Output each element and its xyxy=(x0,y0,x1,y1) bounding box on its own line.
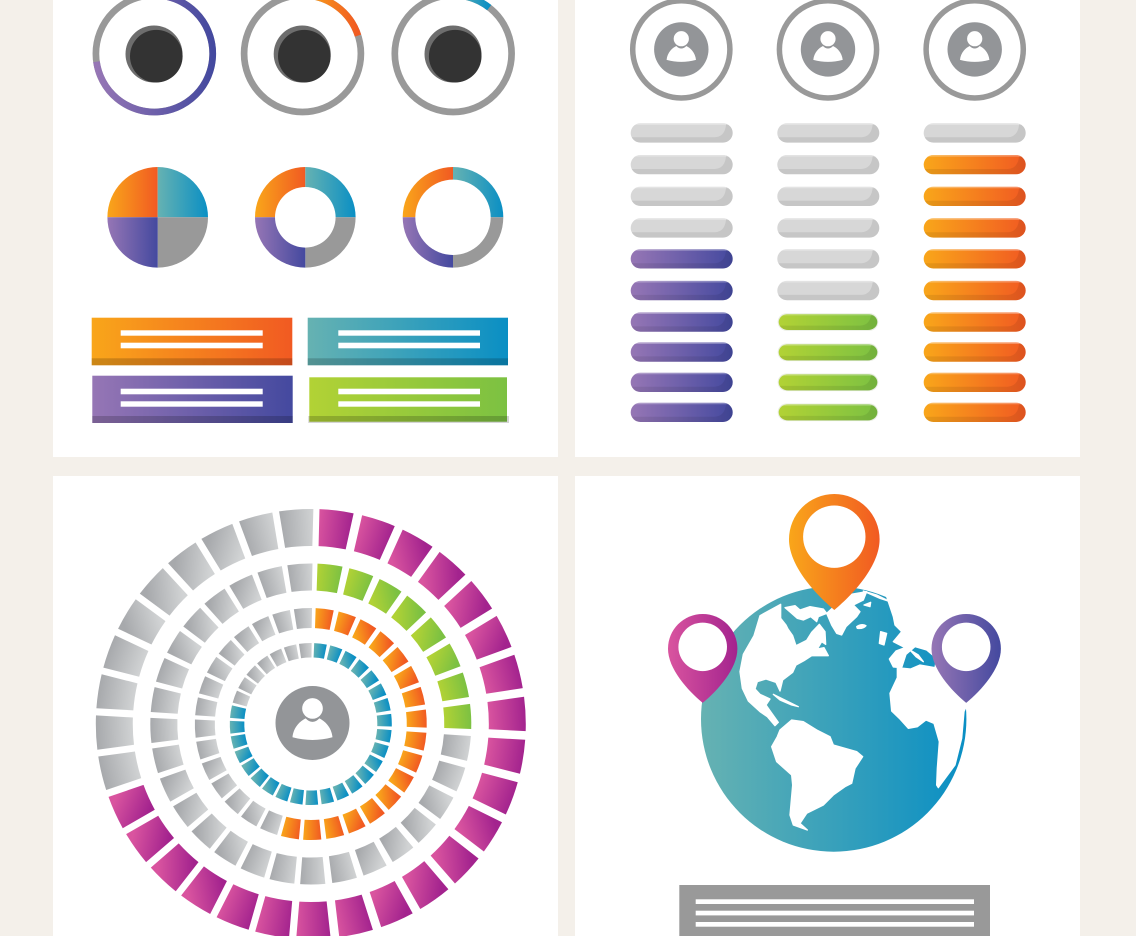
panel: gauges and pies xyxy=(53,0,558,457)
pie chart: four quadrants xyxy=(107,167,208,268)
label block: green xyxy=(308,377,509,423)
user icon ring: column 2 xyxy=(779,1,877,98)
map pin: purple xyxy=(932,614,1001,703)
bar column 1: gray and purple xyxy=(630,122,734,423)
label block: purple xyxy=(92,376,293,423)
panel: user bars xyxy=(575,0,1080,457)
text block placeholder: gray xyxy=(679,885,990,936)
label block: teal xyxy=(308,318,508,365)
radial ring 2: green and gray xyxy=(150,563,472,885)
radial ring 1: pink and gray xyxy=(95,508,526,936)
donut chart: thick xyxy=(255,167,356,268)
continents xyxy=(740,591,968,830)
radial ring 4: blue and gray xyxy=(230,643,392,805)
map pin: orange xyxy=(789,494,880,610)
donut chart: thin xyxy=(403,167,503,268)
bar column 2: gray and green xyxy=(776,122,880,421)
label block: orange xyxy=(92,318,292,365)
globe xyxy=(701,586,968,852)
gauge ring: orange progress xyxy=(244,0,361,112)
gauge ring: large purple progress xyxy=(96,0,213,112)
icon: center user xyxy=(276,686,350,760)
panel: radial segmented chart xyxy=(53,476,558,936)
radial ring 3: orange and gray xyxy=(195,608,427,840)
bar column 3: gray and orange xyxy=(923,122,1027,423)
gauge ring: blue progress xyxy=(395,0,512,112)
map pin: pink xyxy=(668,614,737,703)
user icon ring: column 3 xyxy=(926,1,1023,98)
panel: globe with pins xyxy=(575,476,1080,936)
user icon ring: column 1 xyxy=(633,1,730,98)
